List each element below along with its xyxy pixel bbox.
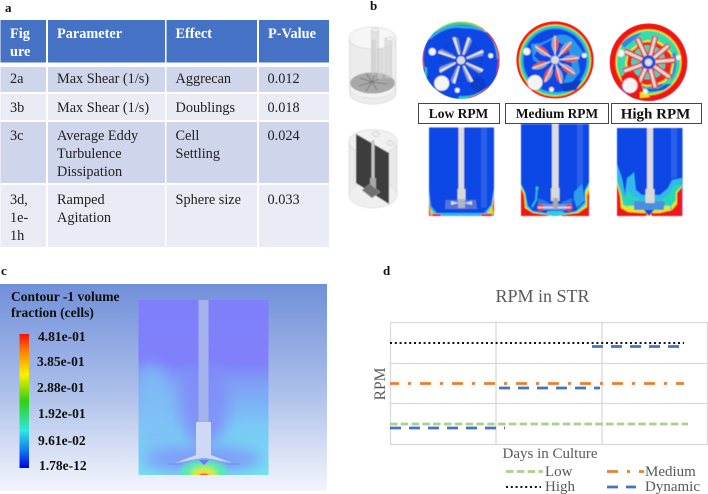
- contour: high RPM side view: [617, 128, 682, 216]
- table row 3d: 3d,: [10, 192, 28, 208]
- table row 3c: Dissipation: [57, 164, 122, 180]
- panel label a: a: [5, 0, 12, 15]
- contour plot: [138, 300, 268, 488]
- table row 2a: Aggrecan: [176, 71, 231, 87]
- label: Medium RPM: Medium RPM: [516, 106, 598, 121]
- table row 3d: [0, 185, 329, 247]
- icon: tank with cross-section plane: [349, 130, 397, 208]
- contour: low RPM side view: [429, 128, 494, 216]
- panel c: volume fraction contour: [0, 284, 327, 491]
- table row 3b: Doublings: [176, 100, 236, 116]
- table row 3d: Ramped: [57, 192, 105, 208]
- impeller blades: [438, 36, 485, 84]
- table header row: Effect: [176, 26, 212, 42]
- legend title: fraction (cells): [11, 305, 94, 320]
- panel label c: c: [1, 263, 7, 278]
- axis title: RPM: RPM: [372, 367, 389, 400]
- panel d: RPM line chart: [372, 286, 708, 494]
- colour bar tick labels: [37, 329, 87, 473]
- colour bar: [20, 334, 29, 468]
- table row 3d: 1e-: [10, 210, 28, 226]
- table row 3b: [0, 94, 329, 120]
- contour: high RPM top view: [610, 23, 688, 101]
- table row 2a: 0.012: [268, 71, 300, 87]
- table row 3c: Turbulence: [57, 146, 122, 162]
- line: Dynamic: [390, 346, 680, 428]
- label: Low RPM: Low RPM: [429, 106, 489, 121]
- axis title: days in culture: Days in Culture: [502, 446, 598, 462]
- table row 3b: 3b: [10, 100, 24, 116]
- contour: low RPM top view: [422, 20, 500, 99]
- label: Low RPM: [418, 104, 500, 124]
- panel a: parameter table: [0, 20, 329, 247]
- label: High RPM: High RPM: [621, 106, 690, 122]
- table row 3b: 0.018: [268, 100, 300, 116]
- table row 3c: [0, 122, 329, 183]
- colour bar tick labels: 3.85e-01: [37, 354, 85, 369]
- line: Low: [390, 423, 688, 425]
- table row 3d: 1h: [10, 228, 24, 244]
- table header row: P-Value: [268, 26, 316, 42]
- table header row: Fig: [10, 26, 31, 42]
- legend title: [11, 289, 120, 320]
- label: Medium RPM: [506, 104, 608, 124]
- table header row: Parameter: [57, 26, 123, 42]
- legend: Medium: [645, 464, 696, 480]
- line: Medium: [390, 382, 684, 385]
- plot grid: [390, 322, 708, 444]
- legend: Low: [545, 464, 573, 480]
- panel label d: d: [383, 263, 391, 278]
- colour bar tick labels: 4.81e-01: [38, 329, 86, 344]
- contour: medium RPM side view: [521, 124, 589, 216]
- table row 3c: Average Eddy: [57, 128, 139, 144]
- table row 3b: Max Shear (1/s): [57, 100, 149, 116]
- chart title: RPM in STR: [495, 286, 590, 306]
- table row 2a: [0, 67, 329, 92]
- legend: [506, 464, 700, 494]
- line: High: [390, 342, 684, 344]
- table row 3c: Cell: [176, 128, 199, 144]
- colour bar tick labels: 2.88e-01: [37, 380, 85, 395]
- table row 2a: Max Shear (1/s): [57, 71, 149, 87]
- gradient background: [0, 284, 327, 491]
- table row 3c: 3c: [10, 128, 24, 144]
- icon: transparent stirred tank top: [349, 27, 396, 104]
- colour bar tick labels: 1.78e-12: [39, 458, 87, 473]
- colour bar tick labels: 1.92e-01: [38, 406, 86, 421]
- contour: medium RPM top view: [516, 21, 594, 99]
- table row 3c: 0.024: [268, 128, 300, 144]
- table row 3d: Agitation: [57, 210, 111, 226]
- colour bar tick labels: 9.61e-02: [38, 433, 86, 448]
- table header row: [0, 20, 329, 62]
- table row 3d: Sphere size: [176, 192, 241, 208]
- legend title: Contour -1 volume: [11, 289, 120, 304]
- table header row: ure: [10, 44, 30, 60]
- table row 3c: Settling: [176, 146, 220, 162]
- table row 3d: 0.033: [268, 192, 300, 208]
- label: High RPM: [612, 104, 702, 124]
- table row 2a: 2a: [10, 71, 24, 87]
